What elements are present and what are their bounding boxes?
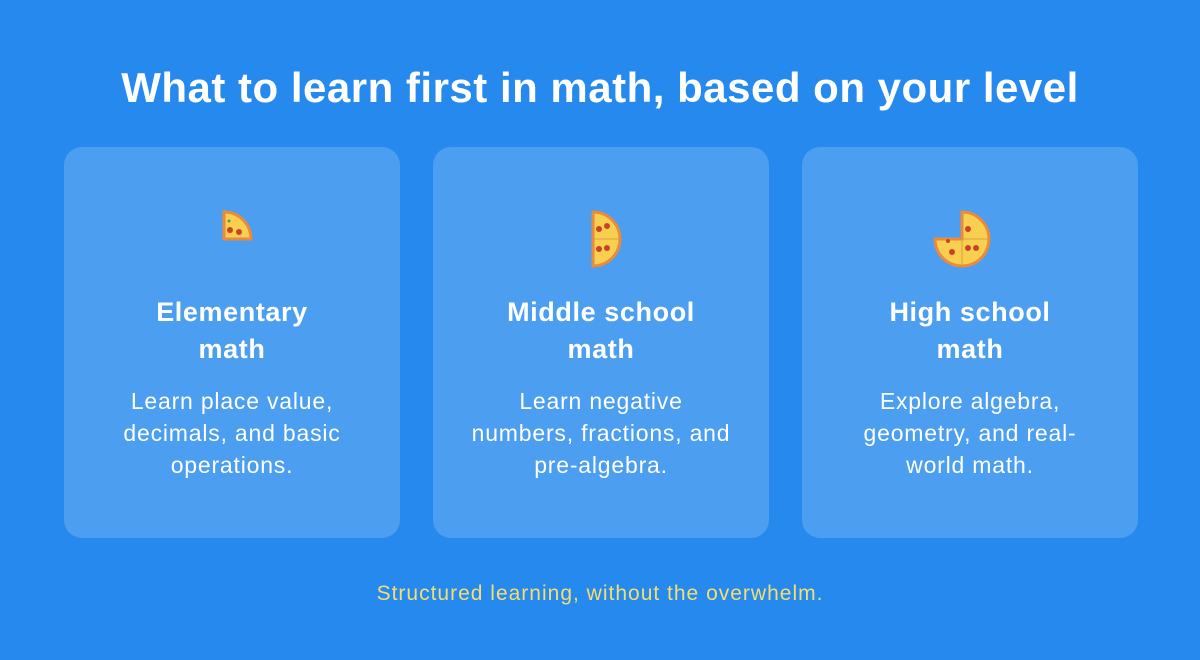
text: Learn negative bbox=[519, 388, 683, 414]
heading: math bbox=[937, 334, 1003, 364]
text: pre-algebra. bbox=[534, 452, 668, 478]
icon: pizza half bbox=[592, 210, 622, 268]
panel: high school bbox=[802, 147, 1138, 538]
heading: math bbox=[568, 334, 634, 364]
heading: Middle school bbox=[507, 297, 695, 327]
heading: High school bbox=[889, 297, 1051, 327]
text bbox=[472, 388, 730, 478]
heading: Elementary bbox=[156, 297, 308, 327]
heading: math bbox=[199, 334, 265, 364]
heading bbox=[156, 297, 308, 364]
icon: pizza three-quarters bbox=[934, 210, 990, 268]
text: decimals, and basic bbox=[123, 420, 341, 446]
text bbox=[123, 388, 341, 478]
icon: pizza quarter bbox=[222, 210, 252, 240]
panel: elementary bbox=[64, 147, 400, 538]
panel: middle school bbox=[433, 147, 769, 538]
footer tagline: Structured learning, without the overwhelm. bbox=[377, 582, 823, 605]
title: What to learn first in math, based on your level bbox=[121, 64, 1079, 111]
text: geometry, and real- bbox=[864, 420, 1076, 446]
text: Explore algebra, bbox=[880, 388, 1060, 414]
heading bbox=[507, 297, 695, 364]
text: world math. bbox=[906, 452, 1034, 478]
text bbox=[864, 388, 1076, 478]
heading bbox=[889, 297, 1051, 364]
text: Learn place value, bbox=[131, 388, 333, 414]
text: numbers, fractions, and bbox=[472, 420, 730, 446]
text: operations. bbox=[171, 452, 293, 478]
